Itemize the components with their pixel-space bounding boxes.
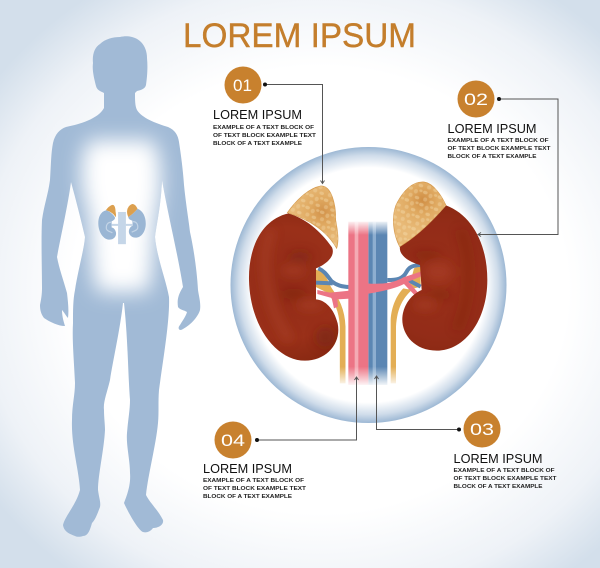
text 04: EXAMPLE OF A TEXT BLOCK OF — [203, 478, 305, 484]
small right adrenal — [127, 204, 138, 217]
left adrenal gland — [287, 186, 338, 248]
badge 04: 04 — [221, 431, 245, 450]
left kidney — [249, 213, 338, 361]
text 03: EXAMPLE OF A TEXT BLOCK OF — [454, 468, 555, 474]
text 01: EXAMPLE OF A TEXT BLOCK OF — [213, 125, 315, 131]
text 03 — [454, 468, 557, 490]
heading 02: LOREM IPSUM — [448, 121, 536, 136]
right renal artery — [367, 272, 421, 297]
text 02: OF TEXT BLOCK EXAMPLE TEXT — [448, 146, 551, 152]
right adrenal gland — [393, 182, 446, 247]
kidney illustration — [249, 182, 487, 387]
circle lens — [230, 147, 506, 423]
heading 04: LOREM IPSUM — [203, 461, 292, 476]
text 02: BLOCK OF A TEXT EXAMPLE — [448, 154, 537, 160]
text 01: BLOCK OF A TEXT EXAMPLE — [213, 141, 302, 147]
text 03: OF TEXT BLOCK EXAMPLE TEXT — [454, 476, 557, 482]
callout 03 — [454, 410, 557, 490]
left renal artery — [317, 290, 350, 308]
small right kidney — [128, 209, 146, 238]
text 04 — [203, 478, 307, 500]
vena cava — [368, 222, 387, 385]
badge 02: 02 — [464, 90, 488, 109]
callout 02 — [448, 80, 551, 160]
small left kidney — [98, 210, 116, 240]
right ureter — [391, 265, 421, 383]
right kidney — [400, 205, 487, 351]
leader line 04 — [255, 377, 358, 442]
leader line 03 — [374, 376, 461, 432]
text 04: BLOCK OF A TEXT EXAMPLE — [203, 494, 292, 500]
vena cava highlight — [373, 222, 376, 385]
small vessels — [112, 212, 132, 244]
text 02 — [448, 138, 551, 160]
heading 01: LOREM IPSUM — [213, 107, 302, 122]
vessel fades — [338, 220, 398, 387]
kidney shading — [286, 251, 446, 346]
left ureter — [315, 269, 343, 383]
leader line 01 — [263, 82, 324, 184]
torso glow — [82, 140, 161, 292]
right renal vein — [387, 265, 421, 287]
small kidneys in silhouette — [98, 204, 146, 244]
heading 03: LOREM IPSUM — [454, 451, 542, 466]
callout 04 — [203, 422, 307, 500]
text 01: OF TEXT BLOCK EXAMPLE TEXT — [213, 133, 317, 139]
human silhouette — [40, 36, 200, 537]
text 02: EXAMPLE OF A TEXT BLOCK OF — [448, 138, 549, 144]
leader line 02 — [478, 97, 558, 236]
badge 01: 01 — [233, 76, 252, 95]
left renal vein — [316, 268, 349, 287]
small left adrenal — [106, 205, 116, 217]
badge 03: 03 — [470, 420, 494, 439]
aorta — [348, 222, 368, 385]
text 01 — [213, 125, 317, 147]
text 04: OF TEXT BLOCK EXAMPLE TEXT — [203, 486, 307, 492]
title: LOREM IPSUM — [183, 17, 416, 55]
callout 01 — [213, 66, 317, 147]
aorta highlight — [355, 222, 358, 385]
text 03: BLOCK OF A TEXT EXAMPLE — [454, 484, 543, 490]
